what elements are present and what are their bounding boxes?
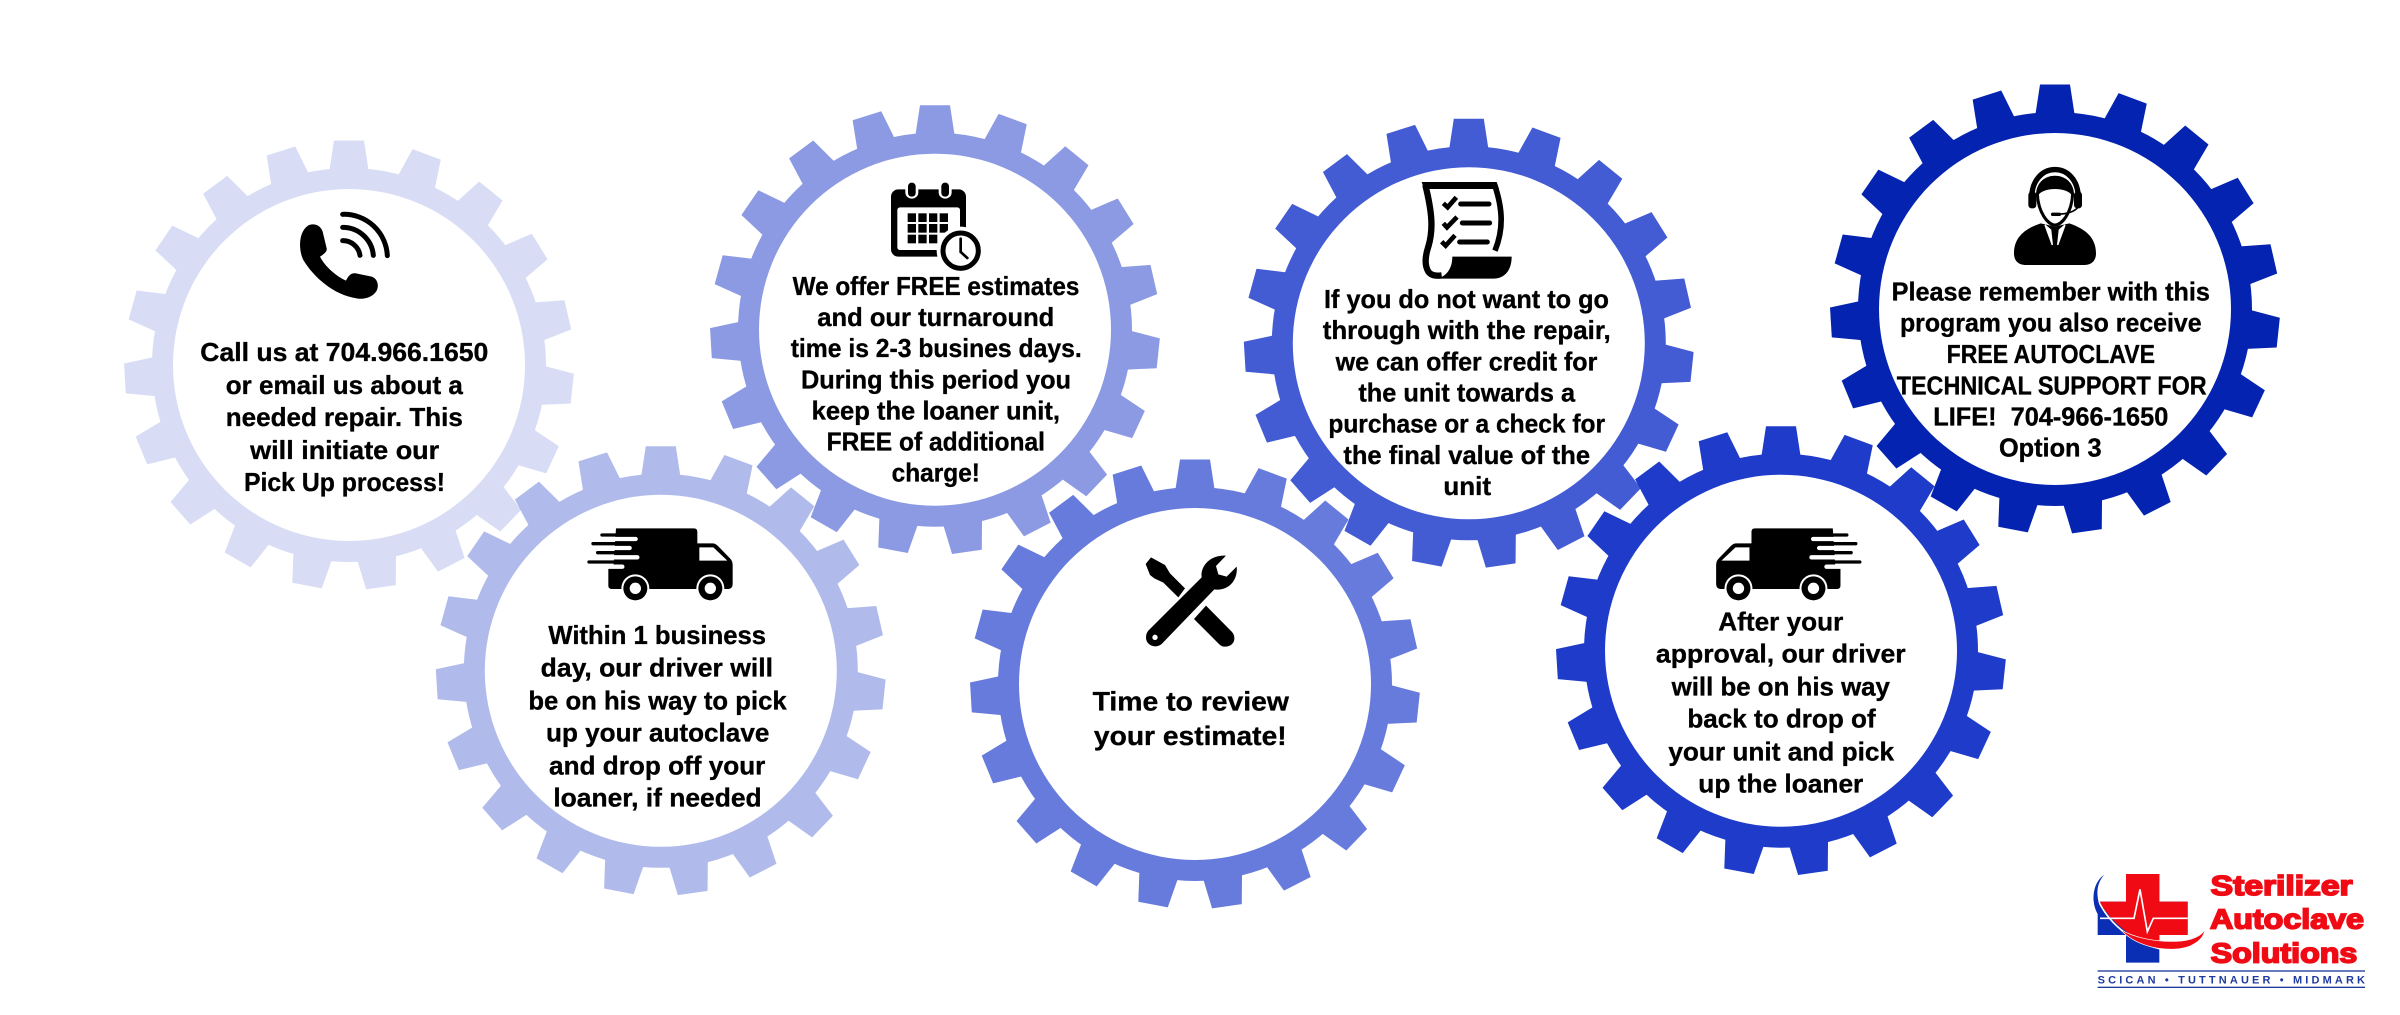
text: step 6: approval, our driver (1656, 639, 1906, 669)
text: step 5: through with the repair, (1323, 315, 1611, 345)
text: step 7: TECHNICAL SUPPORT FOR (1897, 370, 2207, 400)
text: step 7 (1892, 277, 2210, 463)
text: step 3: time is 2-3 busines days. (791, 333, 1082, 363)
text: step 2: be on his way to pick (528, 685, 787, 715)
gear ring: step 7 (1825, 84, 2285, 539)
text: step 5: the final value of the (1343, 440, 1590, 470)
text: step 2: up your autoclave (546, 718, 769, 748)
text: step 7: FREE AUTOCLAVE (1947, 339, 2155, 369)
text: step 5: unit (1443, 471, 1491, 501)
text: step 1: needed repair. This (226, 402, 463, 432)
gear ring: step 3 (705, 105, 1165, 559)
text: step 5 (1323, 284, 1611, 501)
gear ring: step 5 (1238, 119, 1699, 573)
text: step 1: Call us at 704.966.1650 (200, 337, 488, 367)
text: step 7: LIFE! 704-966-1650 (1933, 401, 2168, 431)
text: step 6: After your (1718, 607, 1843, 637)
text: step 7: Option 3 (1999, 433, 2102, 463)
text: step 4: your estimate! (1094, 721, 1287, 751)
text: step 3: We offer FREE estimates (793, 271, 1079, 301)
logo wordmark: Solutions (2211, 938, 2357, 969)
text: step 2 (528, 620, 787, 813)
panel: step 1 call us (119, 140, 579, 595)
icon: delivery truck (583, 528, 733, 602)
text: step 4: Time to review (1093, 687, 1290, 717)
text: step 5: the unit towards a (1358, 377, 1576, 407)
text: step 3 (791, 271, 1082, 488)
text: step 7: program you also receive (1900, 308, 2202, 338)
icon: checklist scroll (1422, 182, 1512, 279)
text: step 2: loaner, if needed (553, 783, 762, 813)
text: step 2: and drop off your (549, 750, 765, 780)
text: step 6 (1656, 607, 1906, 799)
icon: calendar with clock (891, 181, 985, 275)
text: step 2: Within 1 business (548, 620, 766, 650)
text: step 3: charge! (892, 458, 980, 488)
gear ring: step 4 (965, 460, 1425, 914)
gear ring: step 2 (430, 446, 891, 901)
text: step 2: day, our driver will (541, 653, 773, 683)
text: step 6: your unit and pick (1668, 736, 1895, 766)
icon: medical cross with swoosh (2093, 874, 2205, 963)
logo wordmark: Sterilizer (2211, 870, 2353, 901)
text: step 7: Please remember with this (1892, 277, 2210, 307)
logo wordmark: Autoclave (2210, 903, 2364, 934)
logo wordmark (2210, 870, 2364, 969)
text: step 3: During this period you (801, 364, 1071, 394)
panel: step 6 driver returns (1551, 426, 2011, 880)
text: step 5: we can offer credit for (1335, 346, 1597, 376)
text: step 6: will be on his way (1671, 671, 1890, 701)
panel: step 7 free technical support (1825, 84, 2285, 539)
text: step 6: up the loaner (1698, 769, 1863, 799)
text: step 1: Pick Up process! (244, 467, 445, 497)
text: step 1: or email us about a (226, 370, 463, 400)
panel: step 3 free estimates (705, 105, 1165, 559)
icon: support agent with headset (2014, 170, 2096, 265)
text: step 1: will initiate our (249, 435, 439, 465)
panel: step 5 credit option (1238, 119, 1699, 573)
text: step 5: purchase or a check for (1328, 409, 1605, 439)
icon: crossed wrench and screwdriver (1146, 556, 1237, 647)
icon: delivery truck mirrored (1716, 528, 1865, 602)
text: step 3: keep the loaner unit, (812, 395, 1060, 425)
text: step 6: back to drop of (1687, 704, 1876, 734)
text: step 1 (200, 337, 488, 497)
icon: phone (300, 214, 387, 299)
panel: step 4 review estimate (965, 460, 1425, 914)
gear ring: step 1 (119, 140, 579, 595)
logo brands strip: SCICAN • TUTTNAUER • MIDMARK (2098, 975, 2365, 987)
text: step 3: and our turnaround (817, 302, 1054, 332)
text: step 3: FREE of additional (827, 427, 1045, 457)
gear ring: step 6 (1551, 426, 2011, 880)
text: step 4 (1093, 687, 1290, 751)
panel: step 2 driver pick up (430, 446, 891, 901)
logo: Sterilizer Autoclave Solutions (2093, 870, 2365, 988)
text: step 5: If you do not want to go (1324, 284, 1609, 314)
